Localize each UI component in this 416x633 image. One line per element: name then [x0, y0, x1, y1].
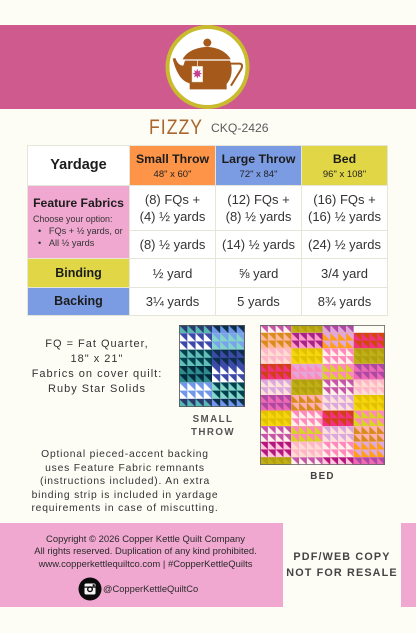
row: feature option two — [130, 231, 215, 258]
notice: not for resale: NOT FOR RESALE — [286, 566, 398, 578]
header: Bed: 96" x 108" — [323, 168, 366, 180]
label: bed: BED — [310, 471, 335, 482]
note: fat quarter and fabrics: FQ = Fat Quarter, — [45, 338, 149, 350]
footer panel: right pink strip — [401, 523, 416, 607]
label: small throw — [191, 414, 235, 438]
note: optional backing: (instructions included). An extra — [40, 476, 210, 487]
copyright text — [34, 534, 257, 570]
yardage table: 3/4 yard — [321, 266, 368, 280]
header: Yardage — [28, 146, 129, 185]
row label: Feature Fabrics: • All ½ yards — [38, 238, 94, 248]
note: optional backing: uses Feature Fabric remnants — [45, 463, 205, 474]
note: optional backing: requirements in case of miscutting. — [31, 503, 219, 514]
row: binding — [28, 259, 129, 287]
note: optional backing: binding strip is included in yardage — [32, 490, 218, 501]
row: feature option one — [130, 186, 215, 230]
header: Yardage: Yardage — [50, 157, 107, 173]
row: backing: Backing — [54, 294, 103, 308]
header: Large Throw: 72" x 84" — [240, 168, 277, 180]
header: Small Throw — [130, 146, 215, 185]
yardage table: (24) ½ yards — [308, 237, 381, 252]
column one — [260, 325, 291, 465]
note: fat quarter and fabrics: Ruby Star Solids — [48, 383, 146, 395]
quilt: bed — [260, 325, 385, 465]
yardage table: ½ yard — [153, 266, 192, 280]
yardage table: (12) FQs + — [227, 192, 290, 207]
copyright text: www.copperkettlequiltco.com | #CopperKettleQuilts — [39, 558, 252, 570]
note: optional backing — [31, 449, 219, 514]
yardage table: (8) ½ yards — [226, 209, 291, 224]
notice: not for resale: PDF/WEB COPY — [293, 551, 391, 563]
label: small throw: THROW — [191, 427, 235, 438]
row: binding: Binding — [55, 266, 102, 280]
row label: Feature Fabrics: Feature Fabrics — [33, 196, 124, 210]
header: Small Throw: Small Throw — [136, 152, 209, 166]
instagram handle: @CopperKettleQuiltCo — [103, 584, 198, 594]
note: fat quarter and fabrics: Fabrics on cover quilt: — [32, 368, 162, 380]
yardage table: 5 yards — [237, 294, 280, 309]
yardage table: (16) FQs + — [313, 192, 376, 207]
yardage table: 3¼ yards — [146, 294, 199, 309]
column four — [354, 325, 385, 465]
note: fat quarter and fabrics — [32, 338, 162, 395]
header: Small Throw: 48" x 60" — [154, 168, 191, 180]
row: backing — [28, 288, 129, 315]
logo: teapot badge — [166, 25, 250, 109]
row label: Feature Fabrics: Choose your option: — [33, 214, 112, 224]
notice: not for resale — [286, 551, 398, 578]
copyright text: All rights reserved. Duplication of any kind prohibited. — [34, 546, 257, 557]
row: feature option one: (8) FQs + — [145, 192, 200, 207]
yardage table — [27, 145, 388, 316]
row: feature option one: (4) ½ yards — [140, 209, 205, 224]
icon: instagram — [78, 578, 102, 600]
yardage table: (14) ½ yards — [222, 237, 295, 252]
row: feature option two: (8) ½ yards — [140, 237, 205, 252]
header band — [0, 25, 416, 109]
pattern code: CKQ-2426 — [211, 121, 269, 135]
yardage table: 8¾ yards — [318, 294, 371, 309]
title: FIZZY: FIZZY — [149, 116, 203, 139]
header: Bed — [302, 146, 387, 185]
header: Large Throw — [216, 146, 301, 185]
yardage table: ⅝ yard — [239, 266, 278, 280]
row label: Feature Fabrics: • FQs + ½ yards, or — [38, 226, 123, 236]
note: optional backing: Optional pieced-accent backing — [41, 449, 209, 460]
header: Bed: Bed — [333, 152, 356, 166]
yardage table: (16) ½ yards — [308, 209, 381, 224]
label: small throw: SMALL — [193, 414, 233, 425]
copyright text: Copyright © 2026 Copper Kettle Quilt Company — [46, 534, 245, 544]
row label: Feature Fabrics — [28, 186, 129, 258]
footer panel: copyright — [0, 523, 283, 607]
note: fat quarter and fabrics: 18" x 21" — [71, 353, 123, 365]
quilt: small throw — [179, 325, 245, 407]
column three — [322, 325, 354, 465]
column two — [291, 325, 322, 465]
header: Large Throw: Large Throw — [222, 152, 295, 166]
